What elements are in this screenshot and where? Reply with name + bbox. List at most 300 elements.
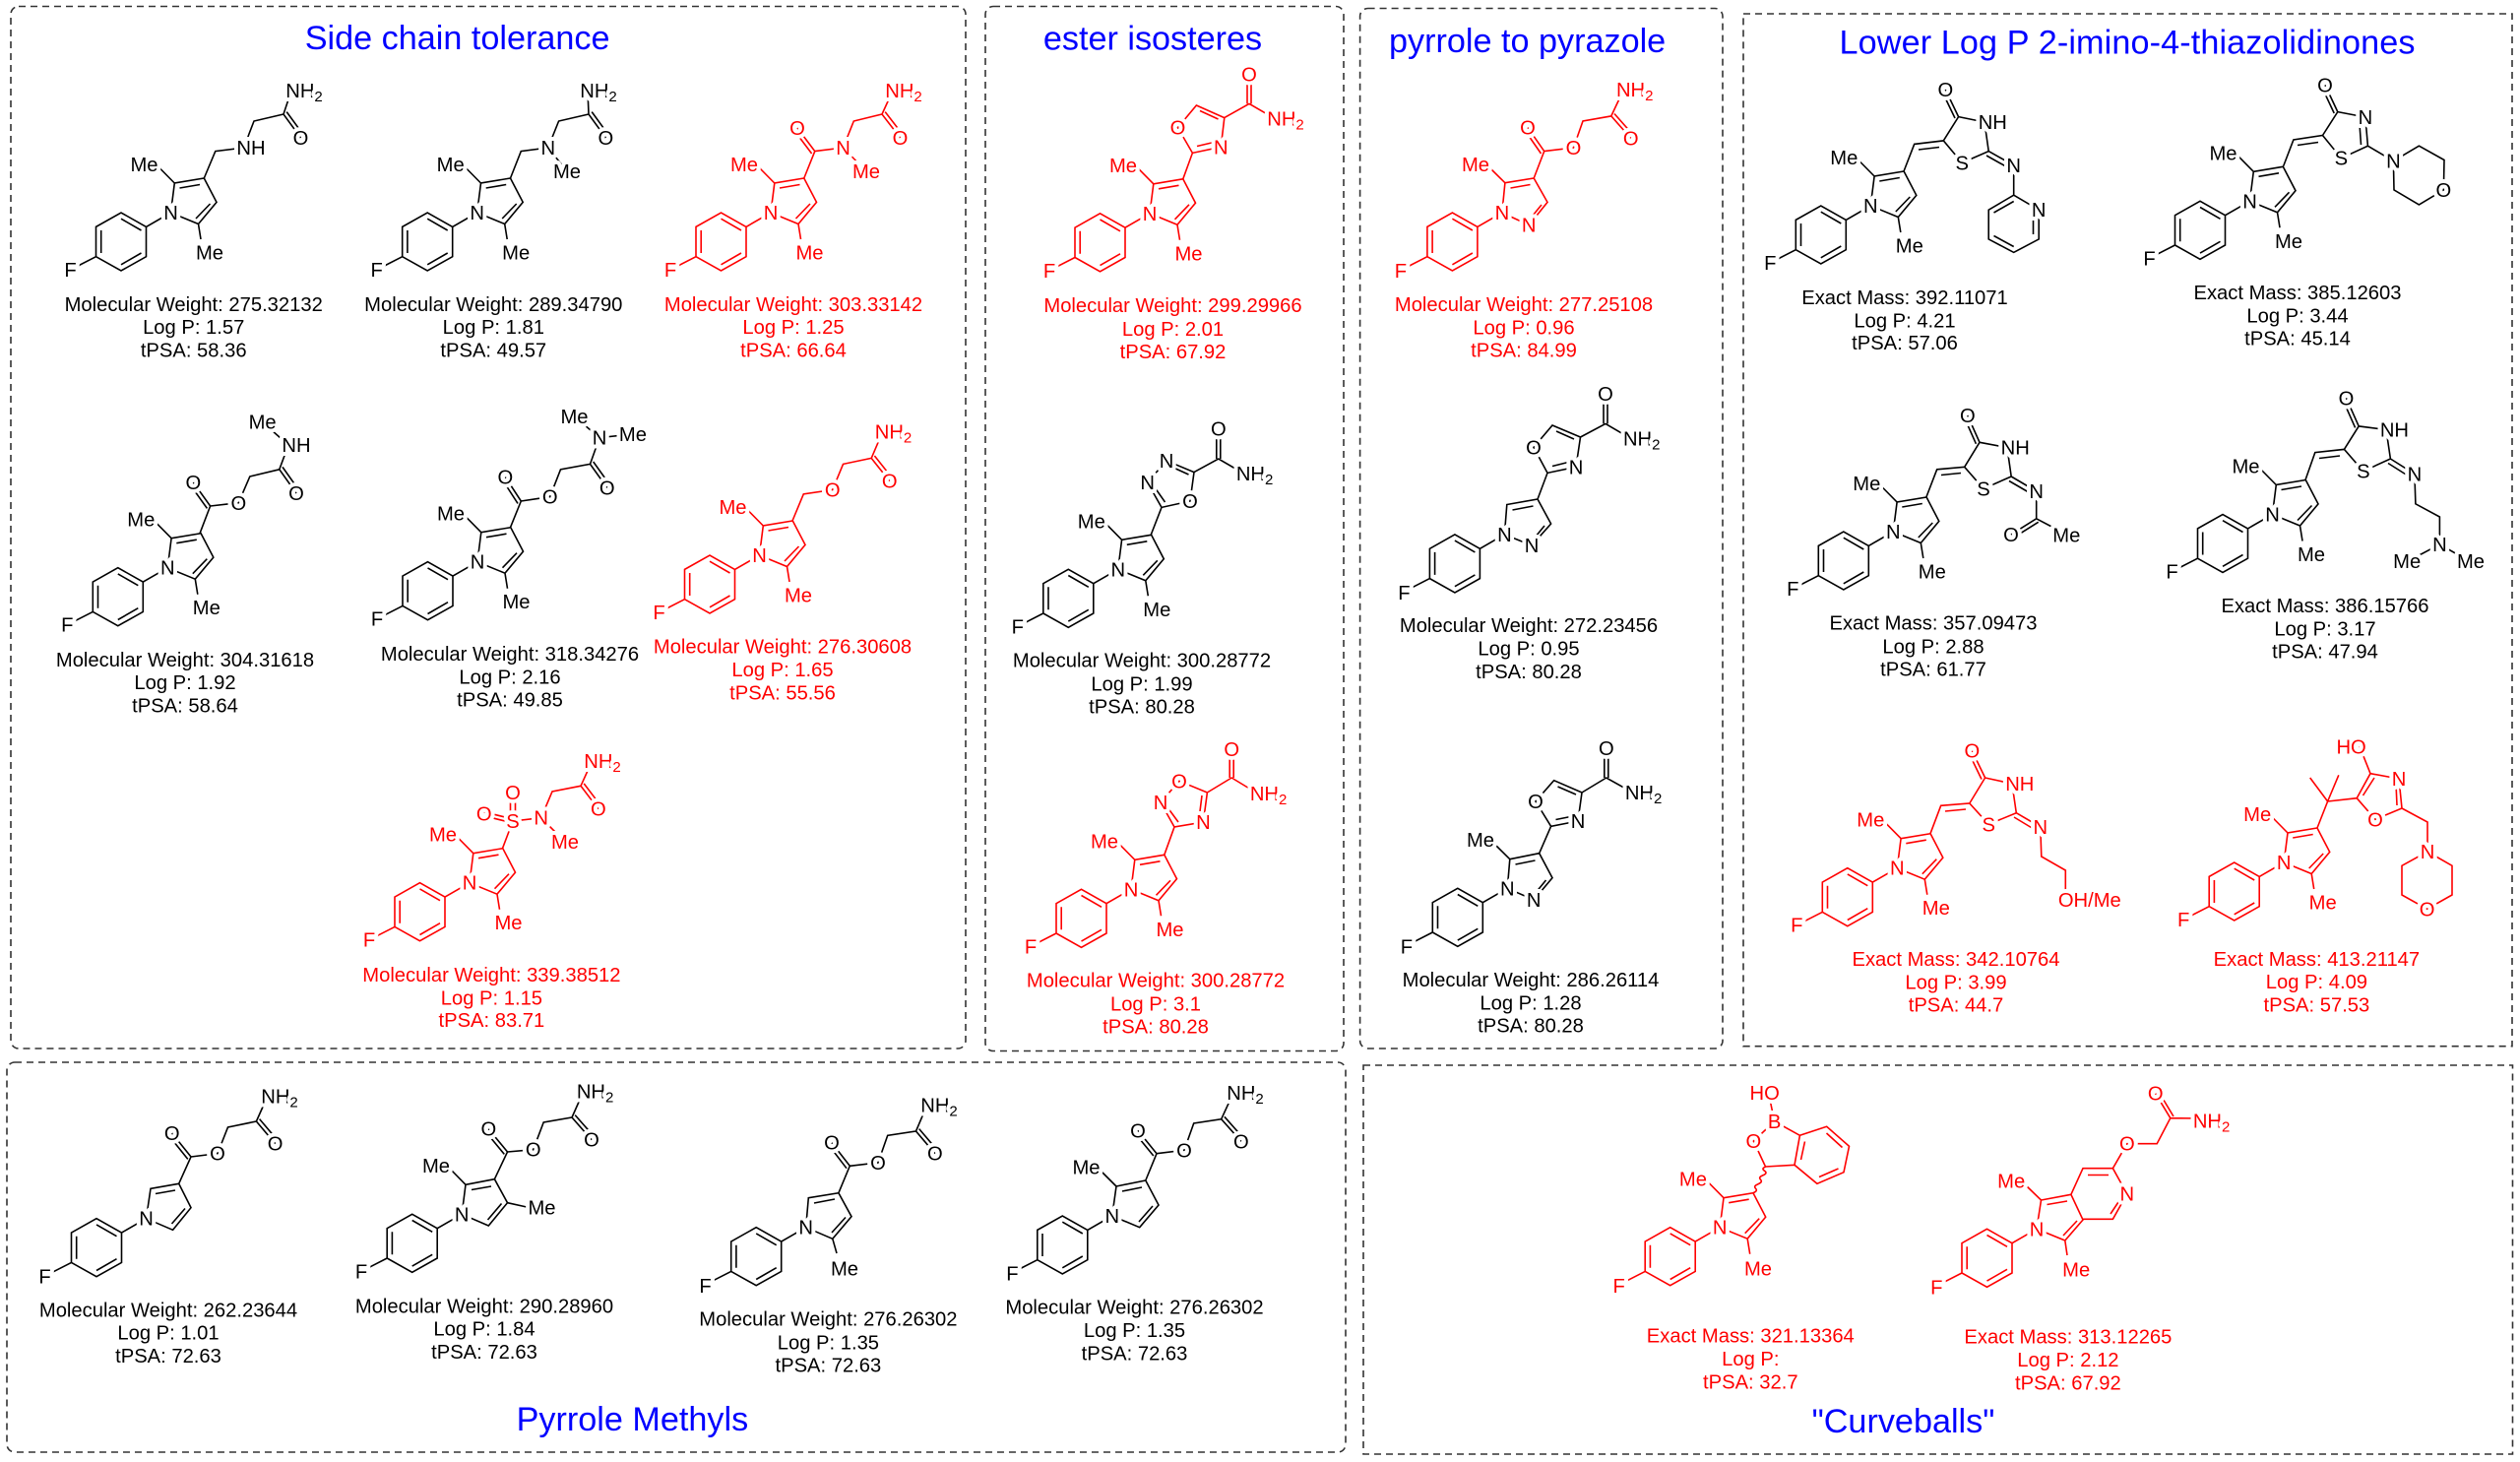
compound: methyl pyrazole oxazole carboxamide: N	[1527, 890, 1541, 912]
properties: Log P: 2.01	[1122, 319, 1224, 341]
compound: unsubstituted pyrrole: O	[164, 1123, 180, 1145]
compound: hydroxy or methoxy ethyl imino thiazolidinone: N	[1890, 858, 1905, 880]
properties: Molecular Weight: 289.34790	[364, 294, 622, 316]
compound: dimethylaminoethyl imino thiazolidinone: Me	[2457, 551, 2485, 573]
properties: tPSA: 72.63	[115, 1346, 221, 1367]
compound: gem-dimethyl oxazole morpholine	[2177, 736, 2452, 1016]
compound: pyrrolopyridine: 2	[2222, 1118, 2230, 1135]
compound: ether side chain: F	[653, 603, 665, 624]
compound: pyrazole ester: Me	[1462, 155, 1489, 176]
compound: morpholino thiazolone: O	[2317, 75, 2333, 96]
compound: pyridyl imino thiazolidinone	[1764, 80, 2046, 354]
properties: Log P: 1.81	[443, 317, 544, 339]
compound: N,N-dimethyl amide ester	[371, 407, 647, 712]
compound: 5-methyl pyrrole: N	[798, 1218, 813, 1240]
compound: gem-dimethyl oxazole morpholine: F	[2177, 910, 2189, 931]
properties: tPSA: 32.7	[1703, 1371, 1798, 1393]
properties: tPSA: 49.85	[457, 690, 563, 712]
compound: pyrazole ester: 2	[1645, 88, 1653, 104]
compound: sulfonamide side chain: Me	[429, 825, 457, 847]
properties: tPSA: 47.94	[2272, 642, 2378, 664]
compound: N-methyl amide side chain: O	[789, 118, 805, 140]
properties: tPSA: 57.53	[2264, 994, 2369, 1016]
compound: pyrazole oxazole carboxamide: F	[1398, 583, 1411, 604]
compound: 5-methyl pyrrole	[699, 1095, 958, 1377]
panel frame	[11, 6, 966, 1049]
compound: ether side chain: N	[752, 545, 767, 567]
compound: benzoxaborole: F	[1613, 1276, 1625, 1298]
compound: N-methyl amide side chain: O	[893, 128, 908, 150]
compound: pyrrolopyridine: F	[1930, 1277, 1942, 1299]
compound: N-methyl aminomethyl side chain: Me	[502, 242, 530, 264]
compound: 2-methyl pyrrole: 2	[1255, 1091, 1264, 1108]
properties: tPSA: 67.92	[2015, 1372, 2121, 1394]
compound: acetyl imino thiazolidinone: S	[1977, 478, 1990, 500]
properties: Molecular Weight: 303.33142	[664, 294, 922, 316]
compound: N-methyl aminomethyl side chain: Me	[437, 155, 465, 176]
compound: acetyl imino thiazolidinone	[1787, 406, 2080, 680]
panel frame	[1743, 14, 2512, 1047]
properties: Molecular Weight: 299.29966	[1043, 295, 1302, 317]
compound: pyridyl imino thiazolidinone: O	[1937, 80, 1953, 101]
compound: ether side chain: O	[825, 480, 841, 502]
properties: tPSA: 58.36	[141, 341, 247, 362]
properties: Log P: 1.35	[778, 1332, 879, 1354]
compound: dimethylaminoethyl imino thiazolidinone: N	[2432, 535, 2447, 556]
compound: 2,4-dimethyl pyrrole: O	[584, 1130, 599, 1152]
compound: 1,3,4-oxadiazole carboxamide: 2	[1265, 472, 1273, 488]
compound: N-methyl amide side chain: NH	[885, 81, 914, 102]
properties: Molecular Weight: 304.31618	[56, 650, 314, 671]
compound: N,N-dimethyl amide ester: Me	[560, 407, 589, 428]
compound: dimethylaminoethyl imino thiazolidinone: N	[2265, 504, 2280, 526]
compound: benzoxaborole: O	[1746, 1131, 1761, 1153]
compound: oxazole carboxamide: N	[1143, 204, 1157, 225]
compound: N,N-dimethyl amide ester: O	[498, 468, 513, 489]
properties: Log P: 3.99	[1905, 972, 2007, 993]
properties: tPSA: 58.64	[132, 696, 238, 718]
compound: 1,3,4-oxadiazole carboxamide	[1012, 419, 1273, 718]
compound: pyrrolopyridine: N	[2030, 1219, 2044, 1240]
compound: N-methyl aminomethyl side chain: Me	[553, 161, 581, 183]
compound: benzoxaborole: B	[1768, 1112, 1781, 1133]
compound: unsubstituted pyrrole: 2	[289, 1094, 298, 1111]
compound: N,N-dimethyl amide ester: F	[371, 609, 383, 631]
properties: Molecular Weight: 318.34276	[381, 644, 639, 666]
properties: tPSA: 57.06	[1852, 333, 1958, 354]
compound: N-methyl amide side chain: Me	[795, 242, 824, 264]
properties: tPSA: 83.71	[439, 1010, 544, 1032]
compound: morpholino thiazolone: S	[2335, 149, 2348, 170]
compound: dimethylaminoethyl imino thiazolidinone: Me	[2298, 544, 2325, 566]
panel: ester isosteres	[985, 6, 1344, 1051]
properties: Log P: 1.25	[742, 317, 845, 339]
compound: morpholino thiazolone: N	[2359, 107, 2372, 129]
compound: unsubstituted pyrrole: O	[210, 1144, 225, 1166]
compound: morpholino thiazolone: N	[2242, 191, 2257, 213]
properties: tPSA: 66.64	[740, 341, 847, 362]
properties: Exact Mass: 392.11071	[1801, 287, 2008, 309]
compound: 5-methyl pyrrole: O	[927, 1144, 943, 1166]
compound: N,N-dimethyl amide ester: N	[471, 552, 484, 574]
panel: side chain tolerance	[11, 6, 966, 1049]
compound: pyrazole ester: N	[1522, 216, 1536, 237]
properties: Log P: 3.1	[1110, 993, 1201, 1015]
compound: 1,3,4-oxadiazole carboxamide: N	[1140, 473, 1155, 494]
compound: N-methyl amide side chain	[664, 81, 922, 362]
compound: N-methyl amide side chain: 2	[914, 89, 922, 105]
properties: tPSA: 61.77	[1880, 659, 1986, 680]
compound: aminomethyl side chain: NH	[285, 81, 314, 102]
compound: N-methyl amide side chain: N	[836, 138, 850, 159]
compound: 1,2,4-oxadiazole carboxamide: Me	[1091, 831, 1118, 853]
compound: pyrrolopyridine: Me	[1997, 1171, 2025, 1192]
properties: Log P: 1.99	[1091, 673, 1193, 695]
compound: methyl pyrazole oxazole carboxamide: NH	[1625, 783, 1654, 804]
properties: Exact Mass: 385.12603	[2194, 283, 2401, 304]
compound: pyrazole ester: NH	[1616, 80, 1645, 101]
compound: N-methyl amide ester: Me	[249, 413, 277, 434]
compound: aminomethyl side chain: Me	[196, 242, 223, 264]
compound: benzoxaborole	[1613, 1083, 1855, 1393]
properties: Molecular Weight: 276.30608	[654, 637, 912, 659]
compound: ether side chain: O	[882, 472, 898, 493]
compound: pyrrolopyridine: O	[2119, 1134, 2135, 1156]
compound: gem-dimethyl oxazole morpholine: N	[2392, 769, 2406, 791]
compound: acetyl imino thiazolidinone: N	[1886, 522, 1901, 543]
properties: Molecular Weight: 286.26114	[1403, 970, 1659, 991]
heading: pyrrole to pyrazole: pyrrole to pyrazole	[1389, 23, 1666, 60]
properties: Exact Mass: 386.15766	[2222, 596, 2428, 617]
compound: pyridyl imino thiazolidinone: N	[1863, 196, 1878, 218]
heading: side chain tolerance: Side chain tolerance	[305, 20, 609, 57]
compound: 1,3,4-oxadiazole carboxamide: F	[1012, 616, 1024, 638]
compound: N-methyl amide ester: O	[186, 473, 201, 494]
compound: hydroxy or methoxy ethyl imino thiazolidinone: N	[2034, 817, 2048, 839]
properties: Molecular Weight: 272.23456	[1400, 615, 1658, 637]
compound: dimethylaminoethyl imino thiazolidinone: NH	[2380, 419, 2409, 441]
compound: benzoxaborole: Me	[1744, 1258, 1772, 1280]
compound: N-methyl aminomethyl side chain: F	[371, 260, 383, 282]
compound: pyridyl imino thiazolidinone: N	[2032, 200, 2046, 222]
compound: pyrazole ester: F	[1395, 261, 1407, 283]
compound: gem-dimethyl oxazole morpholine: O	[2367, 809, 2383, 831]
compound: N,N-dimethyl amide ester: Me	[619, 424, 647, 446]
compound: ether side chain: NH	[875, 422, 904, 444]
compound: 2-methyl pyrrole: O	[1233, 1131, 1249, 1153]
heading: lower log P: Lower Log P 2-imino-4-thiazolidinones	[1839, 25, 2416, 62]
compound: 2,4-dimethyl pyrrole: NH	[577, 1081, 605, 1103]
compound: 1,2,4-oxadiazole carboxamide: N	[1154, 793, 1167, 814]
compound: aminomethyl side chain	[64, 81, 323, 362]
compound: 1,3,4-oxadiazole carboxamide: NH	[1236, 464, 1265, 485]
compound: 2,4-dimethyl pyrrole: F	[355, 1262, 367, 1284]
properties: Molecular Weight: 339.38512	[362, 965, 621, 986]
compound: unsubstituted pyrrole: F	[38, 1267, 51, 1289]
compound: morpholino thiazolone: N	[2386, 152, 2401, 173]
properties: Log P: 1.92	[134, 672, 236, 694]
compound: N-methyl amide ester: O	[288, 483, 304, 505]
compound: acetyl imino thiazolidinone: O	[2003, 525, 2019, 546]
compound: methyl pyrazole oxazole carboxamide: O	[1528, 792, 1544, 813]
compound: gem-dimethyl oxazole morpholine: N	[2421, 842, 2434, 863]
compound: 5-methyl pyrrole: 2	[949, 1103, 958, 1119]
compound: 1,2,4-oxadiazole carboxamide: 2	[1279, 792, 1287, 808]
compound: sulfonamide side chain: N	[463, 873, 476, 895]
compound: unsubstituted pyrrole	[38, 1086, 298, 1367]
compound: pyrazole ester: O	[1520, 118, 1536, 140]
compound: N-methyl amide ester: Me	[127, 510, 155, 532]
compound: hydroxy or methoxy ethyl imino thiazolidinone: F	[1791, 916, 1802, 937]
compound: gem-dimethyl oxazole morpholine: HO	[2336, 736, 2366, 758]
compound: 2-methyl pyrrole: Me	[1072, 1158, 1101, 1179]
compound: oxazole carboxamide: N	[1214, 137, 1228, 159]
compound: dimethylaminoethyl imino thiazolidinone: Me	[2232, 457, 2260, 478]
properties: Molecular Weight: 276.26302	[1005, 1298, 1264, 1319]
compound: N-methyl amide ester: F	[61, 615, 73, 637]
compound: N-methyl amide side chain: N	[764, 203, 778, 224]
compound: pyrazole oxazole carboxamide: O	[1598, 384, 1613, 406]
compound: acetyl imino thiazolidinone: Me	[2052, 526, 2080, 547]
compound: N,N-dimethyl amide ester: O	[599, 477, 615, 499]
compound: 2,4-dimethyl pyrrole: O	[526, 1140, 541, 1162]
compound: dimethylaminoethyl imino thiazolidinone: Me	[2393, 551, 2421, 573]
panel: pyrrole to pyrazole	[1360, 8, 1723, 1049]
compound: 1,2,4-oxadiazole carboxamide: N	[1196, 812, 1211, 834]
compound: hydroxy or methoxy ethyl imino thiazolidinone: OH/Me	[2058, 890, 2121, 912]
compound: hydroxy or methoxy ethyl imino thiazolidinone: Me	[1922, 898, 1950, 920]
properties: Log P: 2.88	[1882, 636, 1984, 658]
properties: Log P: 1.84	[433, 1318, 536, 1340]
properties: tPSA: 84.99	[1471, 340, 1577, 361]
heading: ester isosteres: ester isosteres	[1043, 20, 1262, 57]
properties: Log P: 3.44	[2246, 305, 2349, 327]
compound: 1,2,4-oxadiazole carboxamide: Me	[1156, 920, 1184, 941]
compound: 5-methyl pyrrole: O	[870, 1153, 886, 1175]
properties: Log P: 0.95	[1478, 639, 1580, 661]
compound: ether side chain: 2	[904, 430, 912, 447]
compound: hydroxy or methoxy ethyl imino thiazolidinone: NH	[2005, 774, 2034, 795]
properties: Log P: 1.65	[731, 660, 834, 681]
compound: dimethylaminoethyl imino thiazolidinone	[2166, 388, 2485, 664]
compound: benzoxaborole: N	[1713, 1218, 1727, 1240]
compound: 1,2,4-oxadiazole carboxamide: F	[1025, 936, 1037, 958]
compound: pyrazole oxazole carboxamide: NH	[1623, 428, 1652, 450]
panel: lower log P 2-imino-4-thiazolidinones	[1743, 14, 2512, 1047]
properties: tPSA: 80.28	[1478, 1016, 1584, 1038]
compound: pyrazole oxazole carboxamide: N	[1525, 536, 1539, 557]
compound: pyrazole ester	[1395, 80, 1653, 361]
compound: sulfonamide side chain: O	[476, 804, 492, 826]
compound: N,N-dimethyl amide ester: N	[593, 428, 606, 450]
properties: Molecular Weight: 275.32132	[65, 294, 323, 316]
compound: 2,4-dimethyl pyrrole	[355, 1081, 613, 1364]
compound: 5-methyl pyrrole: F	[699, 1276, 712, 1298]
properties: Log P: 1.01	[117, 1323, 220, 1345]
compound: N,N-dimethyl amide ester: Me	[502, 592, 531, 613]
compound: ether side chain: Me	[785, 585, 812, 606]
properties: tPSA: 72.63	[776, 1356, 881, 1377]
compound: unsubstituted pyrrole: N	[139, 1209, 154, 1231]
compound: hydroxy or methoxy ethyl imino thiazolidinone	[1791, 741, 2121, 1017]
properties: Molecular Weight: 300.28772	[1013, 651, 1271, 672]
properties: Exact Mass: 413.21147	[2214, 949, 2420, 971]
heading: curveballs: "Curveballs"	[1812, 1403, 1994, 1440]
compound: gem-dimethyl oxazole morpholine: O	[2420, 899, 2434, 921]
properties: tPSA: 49.57	[440, 341, 546, 362]
compound: pyrazole ester: O	[1623, 128, 1639, 150]
compound: pyrazole oxazole carboxamide: O	[1526, 437, 1542, 459]
compound: 2,4-dimethyl pyrrole: Me	[422, 1156, 450, 1177]
compound: acetyl imino thiazolidinone: NH	[2001, 438, 2030, 460]
compound: N-methyl aminomethyl side chain	[364, 81, 622, 362]
compound: pyrrolopyridine	[1930, 1084, 2230, 1394]
compound: 5-methyl pyrrole: O	[824, 1133, 840, 1155]
properties: Log P:	[1722, 1349, 1779, 1370]
panel frame	[7, 1062, 1346, 1452]
compound: 1,2,4-oxadiazole carboxamide	[1025, 739, 1287, 1038]
compound: pyrrolopyridine: NH	[2193, 1111, 2222, 1132]
compound: 1,2,4-oxadiazole carboxamide: O	[1224, 739, 1239, 761]
compound: hydroxy or methoxy ethyl imino thiazolidinone: O	[1965, 741, 1980, 763]
compound: 1,3,4-oxadiazole carboxamide: O	[1182, 491, 1198, 513]
compound: methyl pyrazole oxazole carboxamide: 2	[1654, 791, 1662, 807]
compound: N-methyl aminomethyl side chain: 2	[608, 89, 617, 105]
compound: methyl pyrazole oxazole carboxamide: Me	[1467, 830, 1494, 852]
compound: N-methyl aminomethyl side chain: N	[541, 138, 555, 159]
compound: pyrrolopyridine: N	[2120, 1184, 2134, 1206]
compound: 2-methyl pyrrole: NH	[1227, 1083, 1255, 1105]
compound: 2-methyl pyrrole: F	[1006, 1263, 1019, 1285]
compound: sulfonamide side chain	[362, 751, 621, 1032]
compound: benzoxaborole: HO	[1750, 1083, 1780, 1105]
properties: tPSA: 44.7	[1909, 995, 2003, 1017]
compound: N-methyl aminomethyl side chain: O	[598, 128, 613, 150]
compound: oxazole carboxamide: O	[1241, 65, 1257, 87]
compound: oxazole carboxamide: Me	[1174, 243, 1203, 265]
compound: pyrrolopyridine: Me	[2062, 1259, 2090, 1281]
compound: 1,3,4-oxadiazole carboxamide: O	[1211, 419, 1227, 441]
compound: oxazole carboxamide: NH	[1267, 108, 1295, 130]
panel: curveballs	[1363, 1065, 2512, 1454]
compound: 5-methyl pyrrole: NH	[920, 1095, 949, 1116]
compound: morpholino thiazolone: Me	[2209, 143, 2237, 164]
compound: hydroxy or methoxy ethyl imino thiazolidinone: S	[1982, 814, 1995, 836]
compound: pyrrolopyridine: O	[2148, 1084, 2164, 1106]
compound: N-methyl amide ester	[56, 413, 314, 718]
properties: tPSA: 55.56	[729, 682, 836, 704]
properties: tPSA: 80.28	[1089, 696, 1195, 718]
compound: unsubstituted pyrrole: NH	[261, 1086, 289, 1108]
compound: sulfonamide side chain: 2	[612, 759, 621, 776]
compound: gem-dimethyl oxazole morpholine: N	[2277, 853, 2291, 874]
panel frame	[1363, 1065, 2512, 1454]
compound: pyrazole ester: O	[1566, 138, 1581, 159]
compound: pyridyl imino thiazolidinone: S	[1955, 153, 1969, 174]
properties: Molecular Weight: 277.25108	[1395, 294, 1653, 316]
properties: tPSA: 72.63	[1082, 1343, 1187, 1365]
compound: 2-methyl pyrrole: N	[1105, 1206, 1119, 1228]
compound: aminomethyl side chain: 2	[314, 89, 323, 105]
compound: N,N-dimethyl amide ester: Me	[437, 504, 465, 526]
compound: aminomethyl side chain: Me	[130, 155, 158, 176]
properties: Log P: 3.17	[2274, 619, 2376, 641]
properties: Molecular Weight: 276.26302	[699, 1309, 958, 1331]
properties: tPSA: 67.92	[1120, 342, 1226, 363]
compound: 1,3,4-oxadiazole carboxamide: N	[1111, 559, 1125, 581]
compound: acetyl imino thiazolidinone: F	[1787, 579, 1798, 601]
compound: pyrazole oxazole carboxamide: N	[1569, 457, 1583, 478]
compound: oxazole carboxamide	[1043, 65, 1304, 363]
compound: sulfonamide side chain: Me	[551, 832, 579, 854]
compound: N-methyl amide side chain: Me	[730, 155, 758, 176]
compound: oxazole carboxamide: O	[1170, 118, 1185, 140]
compound: methyl pyrazole oxazole carboxamide: O	[1599, 738, 1614, 760]
compound: sulfonamide side chain: S	[506, 811, 520, 833]
compound: dimethylaminoethyl imino thiazolidinone: S	[2357, 462, 2370, 483]
properties: Exact Mass: 357.09473	[1830, 613, 2037, 635]
compound: 1,2,4-oxadiazole carboxamide: NH	[1250, 784, 1279, 805]
compound: sulfonamide side chain: O	[505, 783, 521, 804]
compound: N-methyl amide ester: N	[160, 558, 175, 580]
compound: acetyl imino thiazolidinone: N	[2029, 481, 2044, 503]
properties: Log P: 1.28	[1480, 993, 1582, 1015]
compound: aminomethyl side chain: NH	[236, 138, 266, 159]
compound: 2-methyl pyrrole	[1005, 1083, 1264, 1365]
compound: methyl pyrazole oxazole carboxamide: F	[1401, 937, 1413, 959]
compound: unsubstituted pyrrole: O	[268, 1134, 283, 1156]
compound: pyrazole oxazole carboxamide: 2	[1652, 436, 1660, 453]
compound: aminomethyl side chain: F	[64, 260, 77, 282]
compound: N-methyl aminomethyl side chain: NH	[580, 81, 608, 102]
compound: dimethylaminoethyl imino thiazolidinone: F	[2166, 561, 2178, 583]
properties: Log P: 4.09	[2266, 972, 2367, 993]
properties: Log P: 4.21	[1854, 310, 1956, 332]
compound: N-methyl amide ester: Me	[193, 598, 220, 619]
compound: N-methyl amide side chain: F	[664, 260, 676, 282]
compound: gem-dimethyl oxazole morpholine: Me	[2309, 892, 2337, 914]
compound: pyrazole oxazole carboxamide: N	[1497, 525, 1512, 546]
compound: morpholino thiazolone: O	[2436, 180, 2451, 202]
compound: methyl pyrazole oxazole carboxamide: N	[1571, 811, 1585, 833]
compound: pyrazole ester: N	[1495, 203, 1509, 224]
panel frame	[1360, 8, 1723, 1049]
compound: sulfonamide side chain: F	[363, 930, 375, 952]
compound: pyridyl imino thiazolidinone: Me	[1896, 236, 1923, 258]
properties: Exact Mass: 313.12265	[1964, 1327, 2172, 1349]
compound: N-methyl amide ester: O	[230, 493, 246, 515]
properties: Log P: 2.12	[2017, 1350, 2119, 1371]
compound: pyridyl imino thiazolidinone: Me	[1830, 148, 1858, 169]
compound: 2,4-dimethyl pyrrole: O	[480, 1119, 496, 1141]
compound: 2,4-dimethyl pyrrole: Me	[528, 1198, 556, 1220]
compound: acetyl imino thiazolidinone: Me	[1853, 474, 1880, 495]
properties: Molecular Weight: 290.28960	[355, 1296, 613, 1317]
properties: tPSA: 80.28	[1102, 1016, 1209, 1038]
compound: 1,3,4-oxadiazole carboxamide: Me	[1078, 511, 1105, 533]
properties: Log P: 1.57	[143, 317, 244, 339]
compound: 1,2,4-oxadiazole carboxamide: N	[1124, 879, 1138, 901]
compound: N-methyl aminomethyl side chain: N	[470, 203, 484, 224]
compound: 2-methyl pyrrole: O	[1176, 1140, 1192, 1162]
properties: Molecular Weight: 300.28772	[1027, 971, 1285, 992]
compound: morpholino thiazolone: F	[2143, 248, 2156, 270]
panel frame	[985, 6, 1344, 1051]
properties: tPSA: 80.28	[1476, 662, 1582, 683]
compound: 1,2,4-oxadiazole carboxamide: O	[1171, 771, 1187, 793]
properties: tPSA: 45.14	[2244, 329, 2351, 350]
compound: sulfonamide side chain: NH	[584, 751, 612, 773]
